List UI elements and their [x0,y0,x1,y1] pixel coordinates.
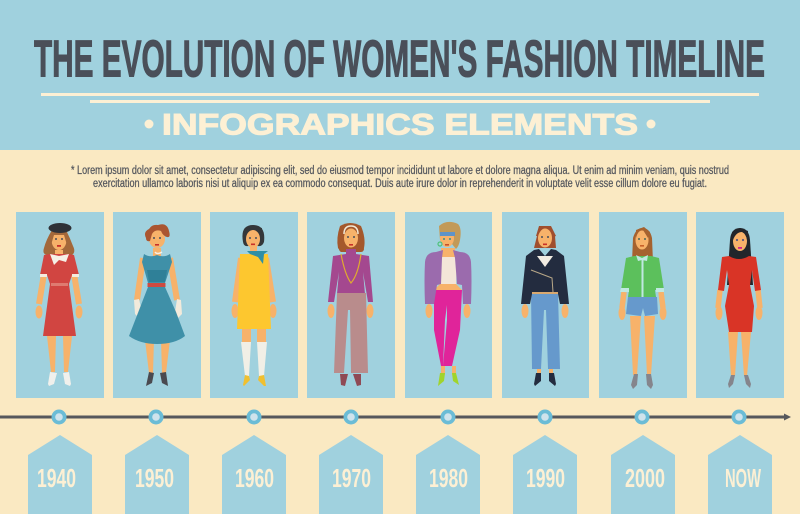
panel: 1960 figure [210,212,298,398]
panel: 1980 figure [405,212,492,398]
year tag: 2000: 2000 [625,463,665,493]
year tag: 2000 [611,435,675,514]
year tag: 1950 [125,435,189,514]
panel: 1990 figure [502,212,589,398]
panel: 1950 figure [113,212,201,398]
year tag: 1940 [28,435,92,514]
year tag: now: NOW [725,463,761,493]
panel: 1940 figure [16,212,104,398]
intro text [71,165,729,190]
year tag: 1970: 1970 [332,463,371,493]
header band [0,0,800,150]
year tag: 1980 [416,435,480,514]
timeline markers [52,410,746,424]
year tag: now [708,435,772,514]
panel: 1970 figure [307,212,395,398]
subtitle: INFOGRAPHICS ELEMENTS [162,108,638,142]
panel: 2000 figure [599,212,687,398]
timeline axis [0,414,791,420]
panel: now figure [696,212,784,398]
year tag: 1990: 1990 [526,463,565,493]
year tag: 1980: 1980 [429,463,468,493]
year tag: 1940: 1940 [37,463,76,493]
year tag: 1960: 1960 [235,463,274,493]
year tag: 1960 [222,435,286,514]
year tag: 1990 [513,435,577,514]
year tag: 1970 [319,435,383,514]
year tag: 1950: 1950 [135,463,174,493]
